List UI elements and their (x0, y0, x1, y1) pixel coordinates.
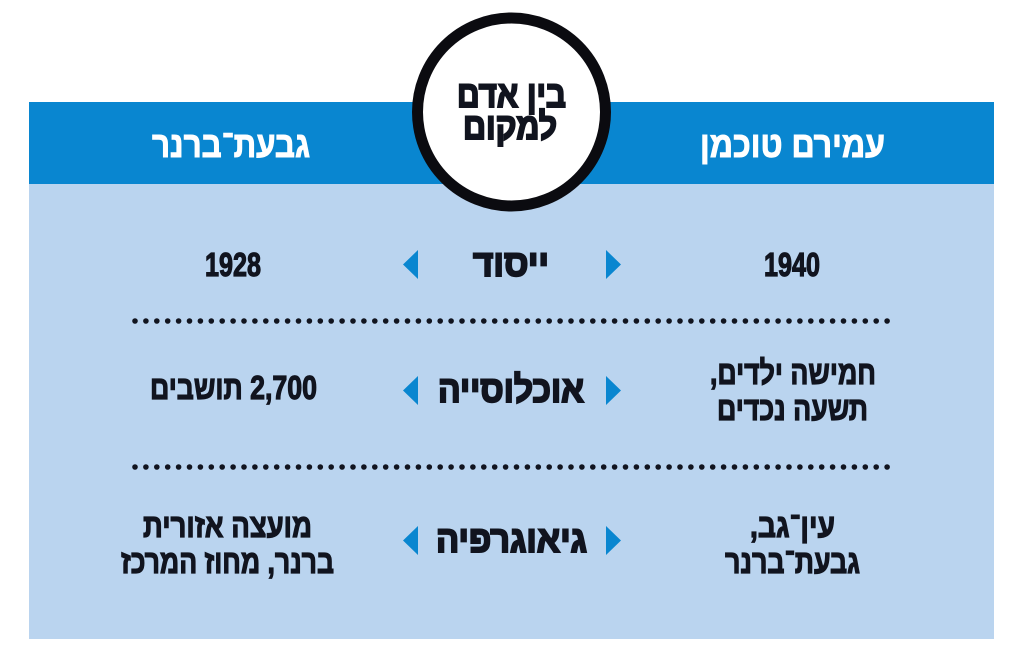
panel: comparison table (29, 102, 994, 639)
badge: center circle title: בין אדם (457, 74, 566, 115)
divider dots 1 (135, 318, 889, 324)
value: Amirim Tuchman population (710, 354, 876, 427)
row label: גיאוגרפיה (436, 519, 587, 560)
value: Givat Brenner geography (121, 507, 334, 580)
value: Amirim Tuchman population: תשעה נכדים (717, 390, 868, 427)
row: population (150, 354, 876, 427)
value: Amirim Tuchman founding year: 1940 (764, 246, 820, 283)
value: Amirim Tuchman population: חמישה ילדים, (710, 354, 876, 391)
icon: right arrow (606, 526, 621, 555)
badge: center circle title (418, 18, 606, 206)
value: Amirim Tuchman geography: גבעת־ברנר (725, 543, 860, 580)
value: Givat Brenner founding year: 1928 (205, 246, 261, 283)
icon: right arrow (606, 376, 621, 405)
value: Givat Brenner geography: ברנר, מחוז המרכז (121, 543, 334, 580)
value: Amirim Tuchman geography: עין־גב, (750, 507, 835, 544)
heading: right column: עמירם טוכמן (700, 124, 885, 165)
value: Givat Brenner geography: מועצה אזורית (143, 507, 312, 544)
row: geography (121, 507, 860, 580)
icon: left arrow (403, 376, 418, 405)
heading: left column: גבעת־ברנר (152, 124, 310, 165)
value: Givat Brenner population: 2,700 תושבים (150, 369, 317, 406)
value: Amirim Tuchman geography (725, 507, 860, 580)
row label: אוכלוסייה (438, 369, 584, 410)
badge: center circle title: למקום (463, 106, 557, 147)
divider dots 2 (135, 464, 889, 470)
icon: left arrow (403, 250, 418, 279)
row: founding (205, 243, 820, 284)
icon: right arrow (606, 250, 621, 279)
icon: left arrow (403, 526, 418, 555)
row label: ייסוד (473, 243, 549, 284)
header band (29, 102, 994, 184)
